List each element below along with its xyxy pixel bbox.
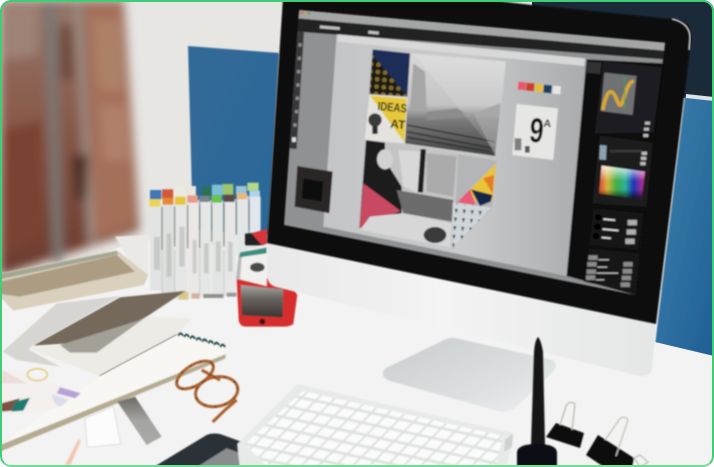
blurred brick column: [0, 0, 139, 276]
ideas poster tile: AT: [390, 117, 407, 132]
marker divider shadows: [161, 200, 250, 250]
spiral binding: [178, 333, 225, 347]
landscape photo: [405, 53, 506, 156]
blue partition panel right: [655, 96, 714, 357]
blue partition panel: [188, 46, 279, 235]
screen contents: [284, 10, 665, 295]
marker lower translucent shading: [154, 227, 233, 297]
left tools strip: [289, 32, 304, 149]
pink pencil: [65, 439, 81, 465]
pen in stand: [517, 337, 557, 467]
drawing tablet: [152, 433, 315, 467]
spiral notebook: [0, 333, 227, 452]
tortoise glasses: [172, 356, 241, 422]
wall background: [0, 0, 714, 290]
monitor stand: [383, 338, 556, 412]
wireless keyboard: [237, 384, 513, 467]
transform panel: [589, 208, 643, 250]
marker set: [149, 183, 261, 300]
curve panel: [595, 62, 662, 137]
notebook white pages: [28, 317, 193, 376]
white paper cards: [85, 407, 121, 447]
left binder clip: [546, 402, 584, 448]
back row marker caps: [150, 183, 260, 199]
metal ruler: [117, 397, 162, 445]
frame mottling: [172, 356, 241, 410]
color spectrum: [599, 166, 645, 199]
marker colored tips: [149, 193, 247, 207]
artboard: [323, 34, 586, 276]
option bar: [297, 18, 664, 59]
number card: A: [543, 118, 552, 130]
right binder clip: [586, 417, 648, 467]
partition top edge: [686, 94, 714, 101]
floating navigator box: [295, 166, 333, 213]
color swatch fan: [2, 369, 81, 415]
binder clips: [546, 402, 648, 467]
white desk surface: [0, 240, 714, 467]
application background: [284, 10, 665, 295]
notebook brown flap: [33, 291, 185, 346]
collage: [358, 49, 506, 248]
left tan book: [0, 235, 148, 311]
red pencil sharpener: [236, 229, 297, 327]
dark background top right: [532, 0, 714, 98]
marker bases: [178, 292, 237, 300]
monitor: [267, 0, 691, 376]
gray fold notebook: [3, 291, 193, 376]
cover dark edge: [100, 335, 177, 376]
color picker panel: [593, 136, 653, 207]
flap shadow: [60, 317, 147, 353]
marker bodies: [150, 196, 261, 299]
ideas poster tile: IDEAS: [377, 99, 408, 116]
navy star tile: [369, 49, 410, 97]
ideas poster tile: [365, 95, 408, 143]
number card: [512, 104, 558, 160]
menu bar: [298, 10, 665, 51]
portrait photo: [358, 140, 458, 247]
frame base: [172, 356, 241, 422]
export panel: [584, 248, 639, 293]
right side dark panels: [567, 59, 663, 295]
geometric triangles tile: [453, 154, 497, 248]
color swatches: [518, 82, 561, 94]
pen base: [517, 444, 557, 467]
window traffic lights: [301, 11, 310, 15]
monitor black bezel: [267, 0, 691, 324]
notebook light cover: [3, 296, 120, 367]
ruler and cards: [65, 397, 162, 465]
number card: 9: [528, 112, 545, 151]
stylus pen: [531, 337, 545, 445]
bezel rim highlight: [672, 19, 690, 50]
monitor white chin: [267, 243, 656, 376]
